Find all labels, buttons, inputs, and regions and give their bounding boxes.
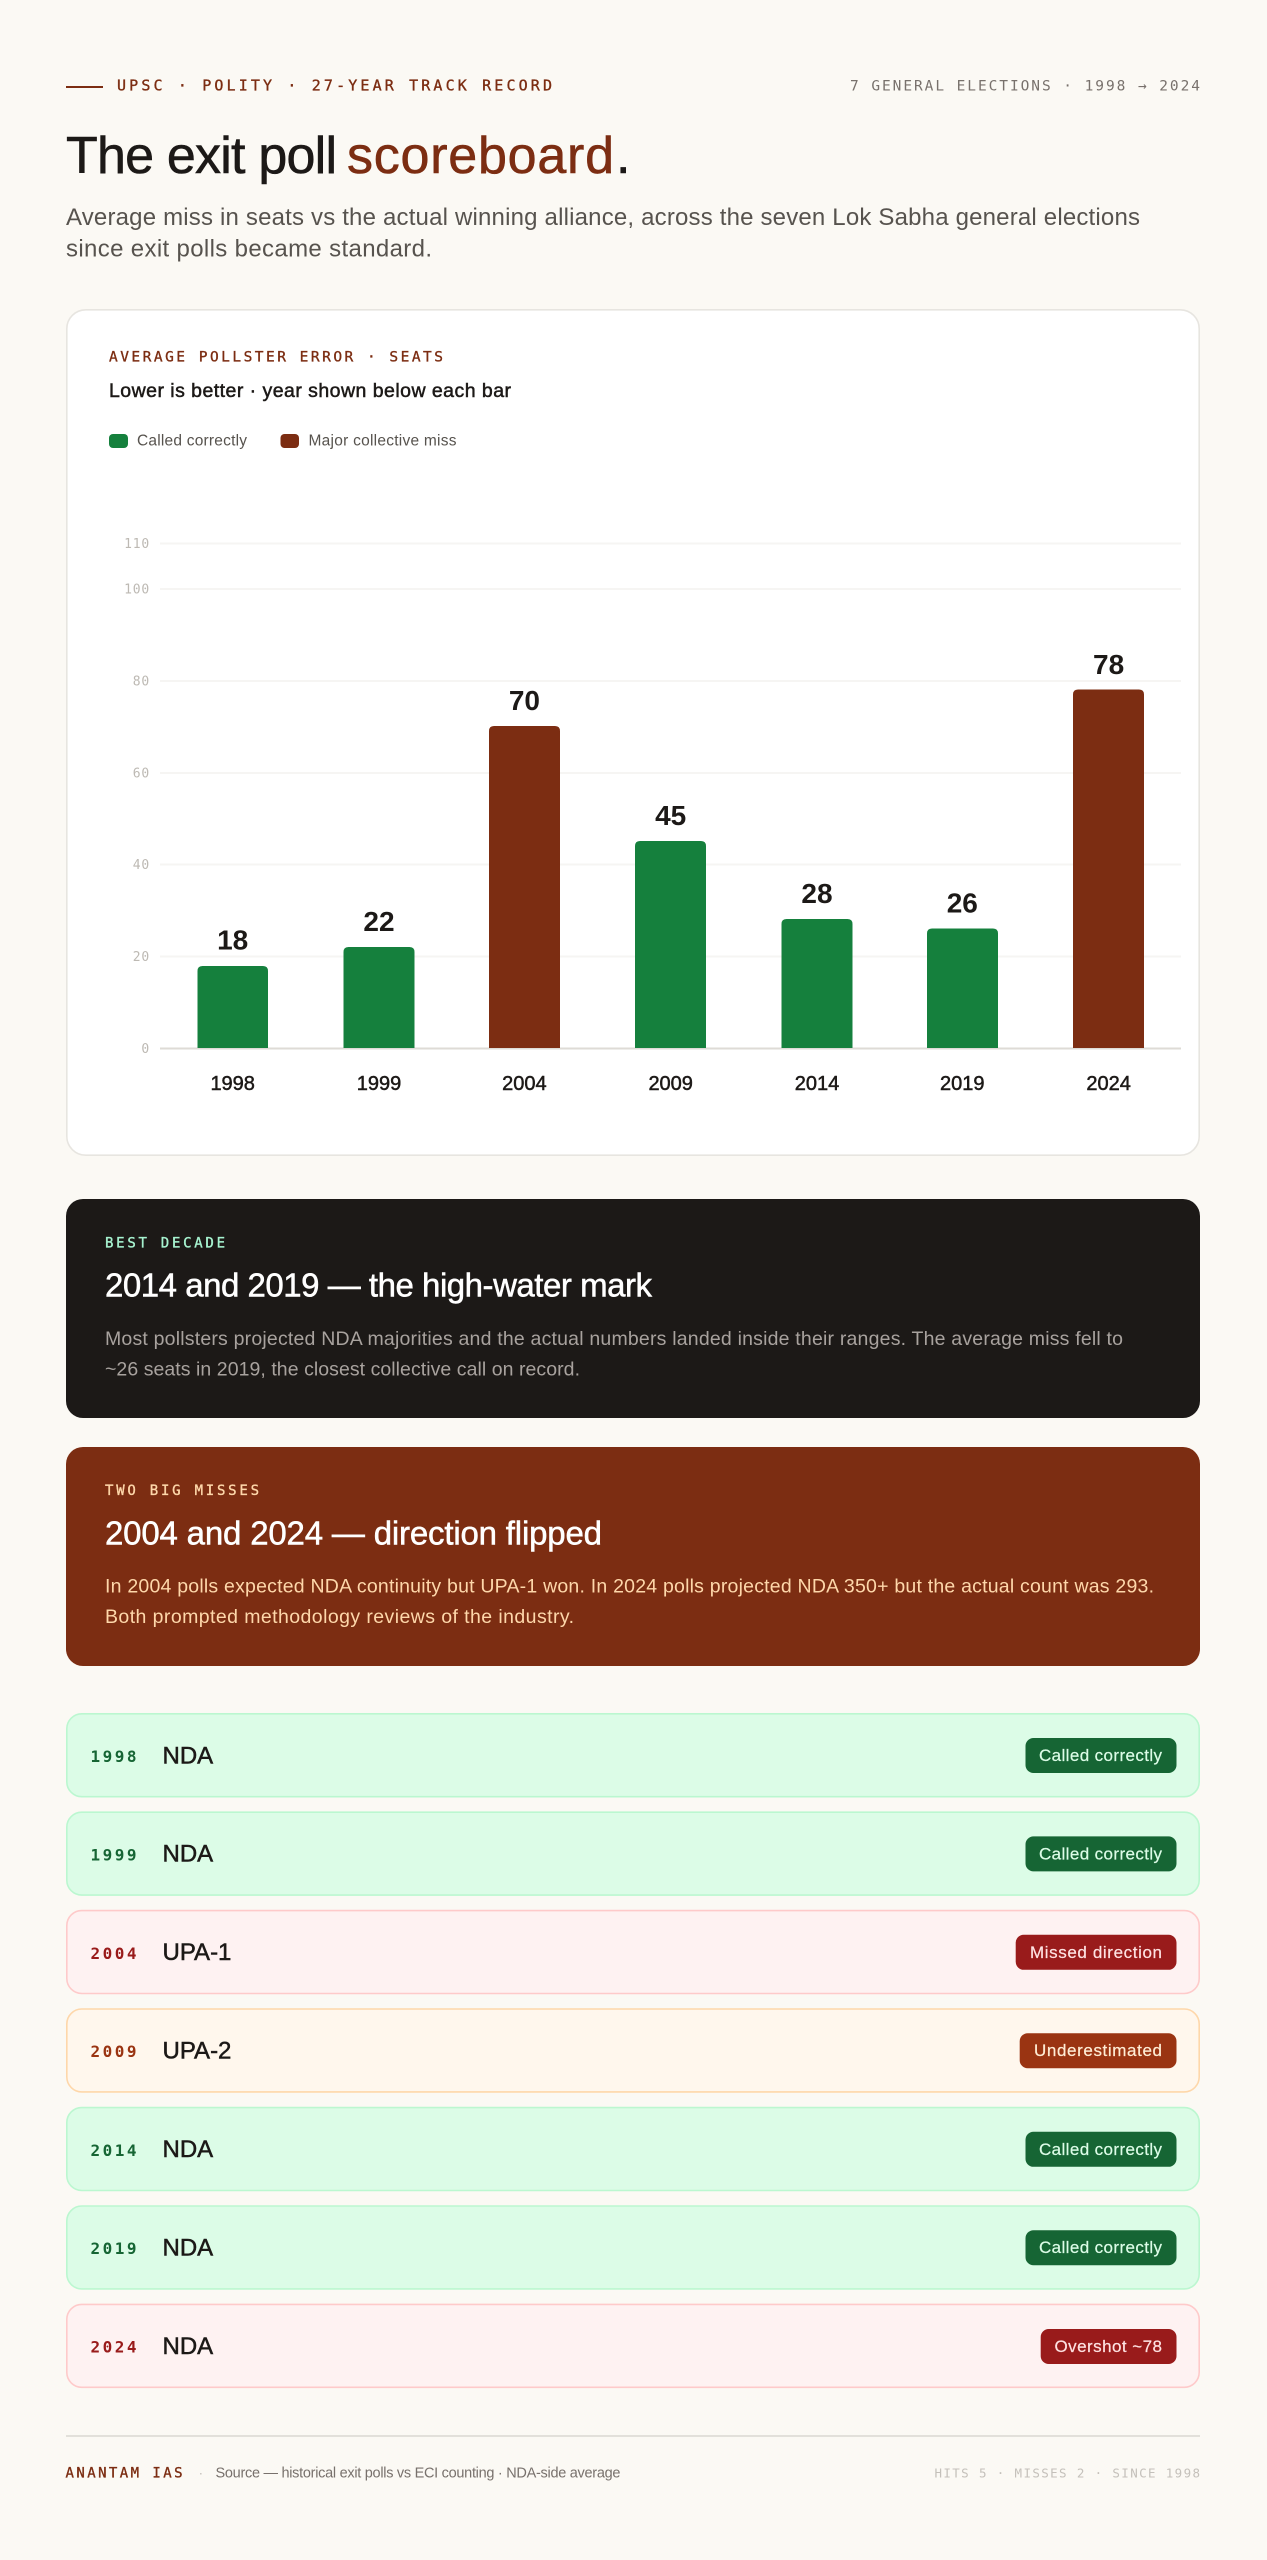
y axis grid and labels: 40 [133, 858, 150, 873]
row: 2019 [67, 2206, 1199, 2289]
row: 2019: 2019 [90, 2239, 136, 2258]
y axis grid and labels: 0 [141, 1042, 150, 1057]
row: 2019: NDA [162, 2234, 213, 2262]
callout body [105, 1328, 1123, 1380]
bars [198, 649, 1144, 1095]
row: 2004: 2004 [90, 1944, 136, 1963]
row: 2024: 2024 [90, 2338, 136, 2357]
y axis grid and labels: 110 [124, 537, 150, 552]
legend: Called correctly [137, 433, 247, 450]
footer: · [198, 2464, 203, 2480]
legend: Major collective miss [308, 433, 457, 450]
row: 2004 [67, 1911, 1199, 1994]
row: 1999: NDA [162, 1841, 213, 1868]
footer tally: HITS 5 · MISSES 2 · SINCE 1998 [934, 2466, 1200, 2480]
subtitle [66, 204, 1140, 263]
callout eyebrow: BEST DECADE [105, 1236, 225, 1252]
row: 1999: 1999 [90, 1845, 136, 1864]
row: 2014: NDA [162, 2136, 213, 2163]
bar: 1999 [344, 906, 414, 1095]
row: 2019: Called correctly [1039, 2238, 1162, 2257]
scoreboard rows [67, 1714, 1199, 2387]
panel: best decade callout [66, 1199, 1200, 1418]
chart eyebrow: AVERAGE POLLSTER ERROR · SEATS [109, 350, 443, 366]
callout body: ~26 seats in 2019, the closest collective call on record. [105, 1358, 580, 1380]
bar: 1999: 22 [363, 906, 395, 937]
bar: 2019 [927, 888, 998, 1095]
callout body: Most pollsters projected NDA majorities and the actual numbers landed inside their ranges. The average miss fell to [105, 1328, 1123, 1350]
title: scoreboard [347, 127, 614, 185]
eyebrow text: UPSC · POLITY · 27-YEAR TRACK RECORD [117, 76, 552, 94]
row: 1999 [67, 1812, 1199, 1895]
panel: two big misses callout [66, 1447, 1200, 1666]
bar: 1998: 1998 [210, 1073, 255, 1095]
row: 2009: 2009 [90, 2042, 136, 2061]
callout body [105, 1576, 1154, 1628]
row: 2024 [67, 2304, 1199, 2387]
footer brand: ANANTAM IAS [66, 2466, 182, 2482]
row: 2004: UPA-1 [162, 1939, 231, 1966]
title: . [616, 127, 630, 185]
bar: 2024: 78 [1093, 649, 1124, 680]
bar: 2009: 2009 [648, 1073, 693, 1095]
callout body: In 2004 polls expected NDA continuity but UPA-1 won. In 2024 polls projected NDA 350+ but the actual count was 293. [105, 1576, 1154, 1598]
row: 2024: NDA [162, 2333, 213, 2360]
bar: 2014 [782, 878, 852, 1095]
legend [109, 433, 457, 450]
bar: 2014: 28 [801, 878, 833, 909]
footer source: Source — historical exit polls vs ECI counting · NDA-side average [216, 2466, 620, 2482]
bar: 2004 [489, 685, 560, 1095]
subtitle: since exit polls became standard. [66, 236, 432, 263]
row: 2014 [67, 2108, 1199, 2190]
y axis grid and labels: 100 [124, 582, 150, 598]
row: 1998 [67, 1714, 1199, 1797]
row: 2014: 2014 [90, 2141, 136, 2160]
chart subtitle: Lower is better · year shown below each bar [109, 380, 512, 402]
bar: 1998: 18 [217, 925, 248, 956]
title: The exit poll [66, 127, 337, 185]
row: 2024: Overshot ~78 [1054, 2337, 1162, 2356]
callout heading: 2014 and 2019 — the high-water mark [105, 1267, 652, 1304]
row: 1998: Called correctly [1039, 1746, 1162, 1765]
bar: 2004: 2004 [502, 1073, 547, 1095]
callout body: Both prompted methodology reviews of the industry. [105, 1606, 574, 1628]
footer [66, 2435, 1200, 2482]
bar: 2009 [635, 800, 706, 1095]
bar: 2009: 45 [655, 800, 686, 831]
y axis grid and labels: 80 [133, 674, 150, 690]
y axis grid and labels: 20 [133, 950, 150, 965]
bar: 2014: 2014 [795, 1073, 839, 1095]
row: 2009: UPA-2 [162, 2038, 231, 2064]
row: 2014: Called correctly [1039, 2140, 1162, 2159]
callout eyebrow: TWO BIG MISSES [105, 1483, 259, 1499]
row: 1999: Called correctly [1039, 1844, 1162, 1863]
eyebrow rule [66, 86, 103, 88]
row: 1998: NDA [162, 1742, 213, 1769]
header meta: 7 GENERAL ELECTIONS · 1998 → 2024 [850, 78, 1200, 94]
bar: 1998 [198, 925, 268, 1095]
row: 2009: Underestimated [1034, 2041, 1162, 2060]
row: 1998: 1998 [90, 1747, 136, 1766]
row: 2004: Missed direction [1030, 1943, 1162, 1962]
callout heading: 2004 and 2024 — direction flipped [105, 1515, 602, 1552]
bar: 1999: 1999 [357, 1073, 401, 1095]
subtitle: Average miss in seats vs the actual winning alliance, across the seven Lok Sabha general elections [66, 204, 1140, 231]
header strip [66, 76, 1200, 94]
y axis grid and labels: 60 [133, 766, 150, 782]
bar: 2004: 70 [509, 685, 540, 716]
y axis grid and labels [124, 537, 1181, 1057]
bar: 2024: 2024 [1086, 1073, 1131, 1095]
panel: bar chart card [67, 310, 1199, 1155]
bar: 2024 [1073, 649, 1144, 1095]
bar: 2019: 2019 [940, 1073, 985, 1095]
row: 2009 [67, 2009, 1199, 2092]
bar: 2019: 26 [947, 888, 978, 918]
title [66, 127, 630, 185]
